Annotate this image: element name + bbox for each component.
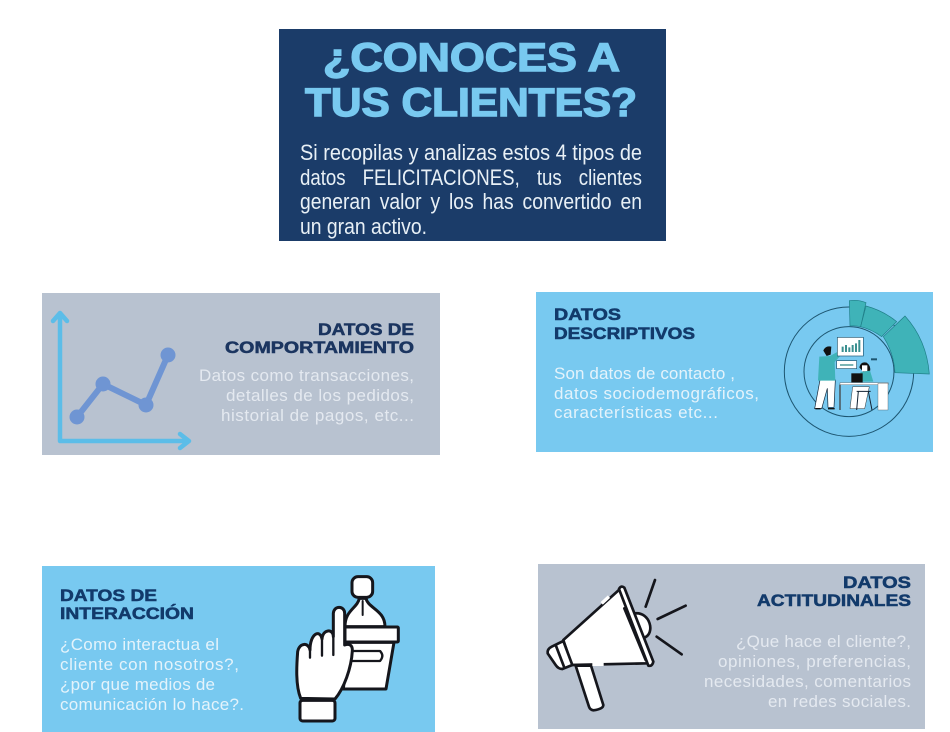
body text: Son datos de contacto , [554,364,735,383]
icon: man presenting [815,346,844,409]
body text [199,366,414,425]
panel: datos de interacción [42,566,435,732]
heading: ACTITUDINALES [757,591,911,610]
icon: megaphone [548,580,686,710]
panel: header [279,29,666,241]
title [305,36,637,125]
heading: DESCRIPTIVOS [554,324,695,343]
panel: datos descriptivos [536,292,933,452]
intro text: generan valor y los has convertido en [300,189,642,214]
heading: INTERACCIÓN [60,604,194,623]
intro text: datos FELICITACIONES, tus clientes [300,165,642,190]
body text: necesidades, comentarios [704,672,911,691]
heading [757,573,911,610]
body text: en redes sociales. [768,692,911,711]
body text [554,364,759,422]
body text: ¿Como interactua el [60,635,219,654]
body text: historial de pagos, etc... [221,406,414,425]
intro text: un gran activo. [300,214,427,239]
panel: datos actitudinales [538,564,925,729]
body text [60,635,244,714]
heading [225,320,414,357]
icon: hand and speaker at lectern [297,577,398,721]
heading: DATOS [554,305,621,324]
body text: cliente con nosotros?, [60,655,239,674]
intro text: Si recopilas y analizas estos 4 tipos de [300,140,642,165]
intro text [300,140,642,239]
heading: COMPORTAMIENTO [225,338,414,357]
title: ¿CONOCES A [323,36,620,80]
heading: DATOS DE [318,320,414,339]
body text: detalles de los pedidos, [226,386,414,405]
title: TUS CLIENTES? [305,81,637,125]
heading: DATOS DE [60,586,157,605]
body text: ¿Que hace el cliente?, [736,632,911,651]
body text: datos sociodemográficos, [554,384,759,403]
icon: line chart [53,313,189,448]
body text: ¿por que medios de [60,675,215,694]
panel: datos de comportamiento [42,293,440,455]
icon: woman at desk [840,362,888,410]
body text: características etc... [554,403,718,422]
body text: comunicación lo hace?. [60,695,244,714]
icon: chart board [837,337,877,369]
heading: DATOS [843,573,911,592]
body text: opiniones, preferencias, [718,652,911,671]
body text [704,632,911,711]
icon: team around data wheel [784,300,929,436]
heading [554,305,695,343]
heading [60,586,194,623]
body text: Datos como transacciones, [199,366,414,385]
